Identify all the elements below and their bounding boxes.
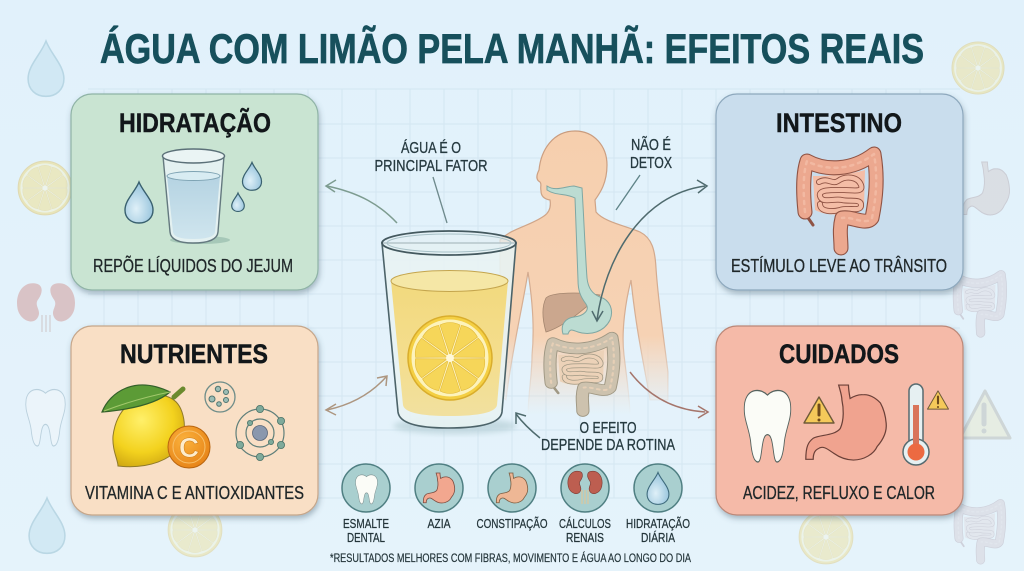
panel: hidratação xyxy=(71,94,318,290)
icon: tooth xyxy=(744,390,791,462)
icon: small warning triangle xyxy=(928,391,948,409)
arrow: to intestino xyxy=(592,180,707,321)
arrow: to nutrientes xyxy=(326,376,387,415)
panel: nutrientes xyxy=(71,326,318,515)
caption: nutrientes: VITAMINA C E ANTIOXIDANTES xyxy=(85,483,304,503)
arrow: rotina xyxy=(516,413,540,438)
liver xyxy=(543,293,600,332)
icon: upper drop xyxy=(242,162,262,190)
icon: intestine xyxy=(804,154,876,248)
icon row xyxy=(342,464,690,545)
icon: atom xyxy=(236,405,285,461)
icon: small drop xyxy=(232,193,244,211)
caption: hidratação: REPÕE LÍQUIDOS DO JEJUM xyxy=(93,255,293,276)
item: azia xyxy=(415,464,463,531)
item: cálculos renais: CÁLCULOS xyxy=(559,516,611,531)
heading: hidratação: HIDRATAÇÃO xyxy=(119,107,271,138)
icon: vitamin C badge xyxy=(168,426,210,468)
heading: nutrientes: NUTRIENTES xyxy=(120,339,268,369)
heading: intestino: INTESTINO xyxy=(776,108,902,138)
icon: large drop xyxy=(125,182,153,223)
caption: intestino: ESTÍMULO LEVE AO TRÂNSITO xyxy=(731,256,947,276)
item: hidratação diária: DIÁRIA xyxy=(641,530,676,545)
item: hidratação diária: HIDRATAÇÃO xyxy=(626,517,690,531)
item: azia: AZIA xyxy=(428,517,451,531)
item: constipação xyxy=(476,464,548,531)
item: constipação: CONSTIPAÇÃO xyxy=(476,517,548,531)
icon: vitamin C badge: C xyxy=(179,432,199,463)
heading: cuidados: CUIDADOS xyxy=(779,339,899,369)
panel: cuidados xyxy=(716,326,963,515)
label: não é detox: NÃO É xyxy=(631,137,671,154)
icon: stomach xyxy=(806,385,886,460)
panel: intestino xyxy=(716,94,963,290)
lemon juice xyxy=(391,281,508,416)
item: cálculos renais: RENAIS xyxy=(566,531,604,545)
human torso xyxy=(500,131,668,415)
icon: lemon with leaf xyxy=(102,385,184,467)
digestive tract: esophagus and stomach xyxy=(547,186,612,334)
arrow: to hidratação xyxy=(326,180,397,223)
label: água é o principal fator xyxy=(374,140,488,223)
arrow: to cuidados xyxy=(630,372,708,418)
caption: cuidados: ACIDEZ, REFLUXO E CALOR xyxy=(743,483,935,503)
label: o efeito depende da rotina xyxy=(541,420,676,454)
main glass with lemon water xyxy=(382,231,517,434)
label: não é detox xyxy=(616,137,673,210)
colon inside torso xyxy=(550,338,614,411)
label: o efeito depende da rotina: O EFEITO xyxy=(580,420,636,437)
background grid xyxy=(88,89,960,498)
item: cálculos renais xyxy=(559,464,611,545)
icon: glass of water xyxy=(162,149,230,244)
item: esmalte dental: DENTAL xyxy=(347,531,385,545)
glass rim xyxy=(382,231,516,255)
icon: small molecule xyxy=(205,382,235,412)
label: não é detox: DETOX xyxy=(630,155,673,172)
icon: warning triangle xyxy=(804,397,834,423)
footnote: *RESULTADOS MELHORES COM FIBRAS, MOVIMENTO E ÁGUA AO LONGO DO DIA xyxy=(330,552,691,565)
label: água é o principal fator: ÁGUA É O xyxy=(401,140,461,157)
label: o efeito depende da rotina: DEPENDE DA ROTINA xyxy=(541,437,676,454)
item: esmalte dental xyxy=(342,464,390,545)
item: esmalte dental: ESMALTE xyxy=(343,517,389,531)
icon: thermometer xyxy=(903,384,929,465)
label: água é o principal fator: PRINCIPAL FATOR xyxy=(374,158,488,175)
item: hidratação diária xyxy=(626,464,690,545)
lemon slice xyxy=(408,316,492,400)
